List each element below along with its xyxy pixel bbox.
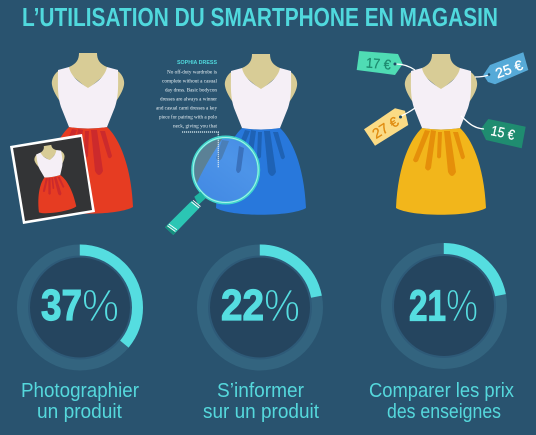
label: s'informer sur un produit: S’informer	[217, 380, 304, 402]
product description text: day dress. Basic bodycon	[165, 88, 218, 93]
product description text: dresses are always a winner	[160, 98, 217, 102]
value 22%	[221, 280, 300, 331]
value 37%: 37	[41, 281, 82, 330]
red dress	[43, 53, 133, 214]
price tag: 25 €	[475, 52, 528, 84]
price tag: 27 €	[364, 108, 415, 146]
label: s'informer sur un produit	[203, 380, 319, 423]
donut chart 37 percent	[17, 244, 143, 370]
value 37%: %	[82, 280, 119, 331]
label: photographier un produit: Photographier	[21, 380, 139, 402]
price tag: 15 €: 15 €	[489, 122, 516, 143]
price tag: 27 €: 27 €	[369, 113, 402, 142]
product description text: neck, giving you that	[173, 124, 218, 130]
stat: 22 percent	[197, 244, 323, 423]
price tag: 17 €: 17 €	[365, 54, 392, 73]
illustration: dress with magnifier	[156, 54, 306, 235]
stat: 21 percent	[369, 243, 514, 423]
yellow dress	[396, 54, 486, 215]
icon: magnifying glass	[165, 131, 260, 235]
product description text	[156, 60, 218, 130]
stat: 37 percent	[17, 244, 143, 423]
price tag: 17 €	[357, 51, 415, 75]
product description text: complete without a casual	[162, 79, 218, 84]
value 22%: %	[264, 280, 300, 331]
value 21%: %	[446, 280, 478, 331]
value 21%: 21	[409, 282, 446, 330]
label: photographier un produit: un produit	[37, 401, 122, 423]
price tag: 15 €	[461, 116, 526, 148]
donut chart 21 percent	[381, 243, 507, 369]
value 22%: 22	[221, 281, 264, 330]
label: comparer les prix des enseignes: Comparer les prix	[369, 380, 514, 402]
donut chart 22 percent	[197, 244, 323, 370]
value 21%	[409, 280, 478, 331]
label: s'informer sur un produit: sur un produit	[203, 401, 319, 423]
blue dress	[216, 54, 306, 215]
label: photographier un produit	[21, 380, 139, 423]
product description text: SOPHIA DRESS	[177, 60, 218, 66]
illustration: dress with price tags	[357, 51, 528, 215]
price tag: 25 €: 25 €	[493, 57, 525, 81]
product description text: piece for pairing with a polo	[159, 116, 218, 120]
product description text: No off-duty wardrobe is	[167, 70, 217, 75]
label: comparer les prix des enseignes	[369, 380, 514, 423]
illustration: dress with photo	[10, 53, 133, 224]
value 37%	[41, 280, 119, 331]
label: comparer les prix des enseignes: des enseignes	[387, 401, 501, 423]
product description text: and casual cami dresses a key	[156, 106, 218, 112]
photo print of the dress	[10, 134, 95, 224]
